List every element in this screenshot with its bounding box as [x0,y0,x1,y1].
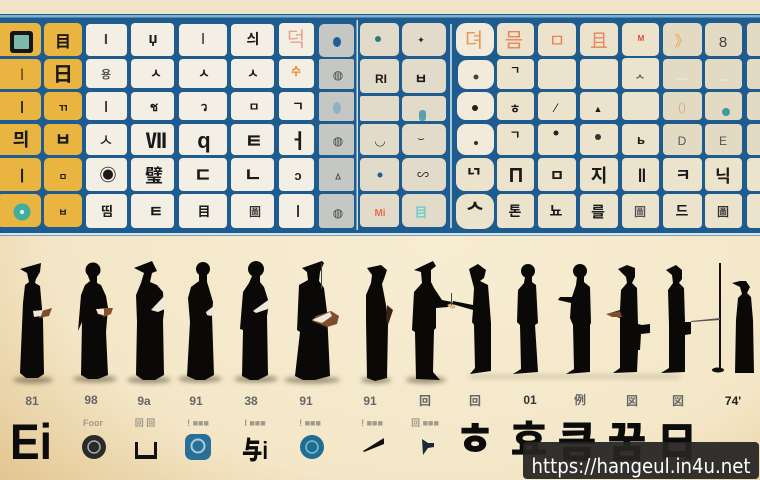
pole with pointer [691,263,724,372]
yellow key columns [0,23,82,227]
row of small number labels: 81 [25,394,39,408]
white key columns: ㅌ [149,204,163,221]
white key columns: ◉ [100,166,116,185]
white key columns: 싀 [247,31,259,47]
row of small grey captions [83,418,439,428]
white key columns: ㄱ [292,99,304,114]
white key columns: ㄷ [194,165,212,187]
white key columns: l [201,31,205,48]
right key columns: 》 [674,33,690,50]
middle key columns: ◡ [374,133,386,148]
right key columns: ᄉ [466,201,484,223]
right key columns: ᄓ [466,166,482,186]
white key columns: џ [148,30,158,47]
bottom row glyphs and icons: 日 [657,421,697,465]
white key columns: ㅅ [198,66,210,81]
bottom row glyphs and icons: Ei [10,414,52,470]
right key columns: ▲ [594,104,602,114]
white key columns: ㅓ [289,130,307,153]
row of small grey captions: l ■■■ [244,418,266,428]
grey key column: ㅿ [332,170,344,184]
white key columns: 璧 [145,166,163,186]
right key columns: D [678,134,687,148]
row of small number labels: 01 [523,393,537,407]
yellow key columns: 日 [53,64,73,86]
right key columns: 뇨 [550,203,563,219]
white key columns: ㅅ [98,131,114,150]
right key columns: () [678,100,686,114]
row of small number labels: 38 [244,394,258,408]
middle key columns: ⌣ [417,131,425,145]
row of small number labels: 74' [725,394,741,408]
figure 7: scholar [366,265,393,381]
white key columns: ㅌ [245,131,263,153]
panel: keyboard [0,14,760,236]
white key columns: ㅅ [150,66,162,81]
row of small number labels: 図 [626,394,638,408]
yellow key columns: ㅂ [58,208,68,219]
grey key column: ◍ [333,68,343,82]
figure 4: scholar [187,262,218,380]
row of small number labels: 回 [469,394,481,408]
row of small grey captions: 回 ■■■ [411,418,439,428]
middle key columns: RI [375,72,387,86]
middle key columns: Mi [374,208,386,219]
right key columns: ǁ [638,166,646,186]
yellow key columns: ㅣ [16,100,28,115]
row of small number labels: 91 [299,394,313,408]
white key columns: ㅅ [247,66,259,81]
row of small grey captions: Foor [83,418,103,428]
bottom row glyphs and icons: 큼 [558,419,596,466]
right key columns: 드 [676,203,689,219]
bottom row glyphs and icons: 효 [511,419,547,463]
figure 12: man with briefcase [606,265,650,373]
right key columns: 圖 [634,205,646,219]
yellow key columns: 믜 [13,130,29,150]
white key columns: ว [201,100,208,114]
figure 3: scholar with mortarboard [134,261,167,380]
row of small number labels: 9a [137,394,151,408]
yellow key columns: ㅣ [16,67,28,82]
bottom row glyphs and icons: ㅎ [455,416,495,465]
white key columns: ㅁ [248,100,260,114]
figure 8: man in suit shaking hands [412,261,452,380]
grey key column: ◍ [333,206,343,220]
figure 10: man in suit [513,264,538,374]
right key columns: M [638,34,645,43]
white key columns: 용 [101,68,111,81]
white key columns: ㅣ [100,100,112,114]
right key columns: ь [637,132,645,147]
right key columns: 且 [590,31,608,51]
right key columns: ㅋ [675,166,691,185]
white key columns: q [197,128,211,153]
yellow key columns: ㅁ [59,172,67,182]
right key columns: 톤 [509,203,522,219]
white key columns: I [104,31,108,48]
white key columns: 目 [197,204,211,219]
white key columns: 덕 [287,28,305,51]
white key columns: 수 [291,65,301,78]
figure 14: person in robe [732,281,754,373]
white key columns [86,23,314,228]
right key columns: 닉 [715,167,731,186]
right key columns: ㅁ [550,168,564,185]
icon: teal dot key [14,204,30,220]
row of small grey captions: ! ■■■ [299,418,321,428]
right key columns [456,23,760,229]
row of small number labels: 回 [419,394,431,408]
right key columns: 뎌 [465,29,483,52]
right key columns: ㅎ [509,102,521,116]
figure 11: man with outstretched hand [558,264,591,374]
middle key columns: ∽ [417,168,429,182]
right key columns: Π [509,165,523,187]
white key columns: 圖 [249,205,261,219]
white key columns: ㅣ [292,204,304,219]
middle key columns: ✦ [417,35,425,45]
right key columns: E [719,134,727,148]
yellow key columns: ㄲ [58,103,68,115]
middle key columns: 目 [414,205,428,220]
white key columns: Ⅶ [146,130,166,153]
right key columns: ᄉ [635,74,645,86]
icon: square key symbol [10,31,33,53]
right key columns: 8 [719,34,727,51]
middle key columns [360,23,446,227]
right key columns: ㄱ [510,65,520,77]
white key columns: ㄴ [244,165,262,187]
figure 9: man in suit [452,264,491,374]
yellow key columns: 目 [55,34,71,51]
bottom row glyphs and icons: 与i [242,437,268,465]
yellow key columns: ㅂ [55,130,71,150]
row of small grey captions: 回 回 [135,418,155,428]
right key columns: 지 [591,166,607,186]
bottom row glyphs and icons [10,414,697,470]
white key columns: ช [150,100,158,114]
white key columns: 띰 [101,204,113,219]
figure 13: man with briefcase [661,265,691,373]
row of small number labels: 98 [84,393,98,407]
row of small grey captions: ! ■■■ [187,418,209,428]
row of small grey captions: ! ■■■ [361,418,383,428]
bottom row glyphs and icons: 꿈 [608,419,646,466]
middle key columns: ㅂ [415,71,427,87]
right key columns: ⁄ [552,101,559,115]
right key columns: 를 [591,204,605,221]
figure 1: scholar with book [20,263,52,378]
row of small number labels: 図 [672,394,684,408]
figure 6: scholar with large book [295,261,339,380]
row of small number labels [25,393,741,408]
row of small number labels: 91 [363,394,377,408]
right key columns: 믐 [505,30,523,52]
handshake [447,293,456,309]
figure 2: scholar with book [78,262,113,379]
right key columns: ㄱ [509,128,521,142]
right key columns: ㅁ [549,31,565,51]
grey key column: ◍ [333,134,343,148]
figure 5: scholar with quill [240,261,271,380]
row of small number labels: 91 [189,394,203,408]
ground shadows [13,375,680,384]
grey key column [319,24,354,228]
watermark url [523,442,759,479]
yellow key columns: ㅣ [15,168,29,185]
row of small number labels: 例 [574,393,586,407]
right key columns: 圖 [717,205,729,219]
white key columns: ɔ [294,168,302,183]
